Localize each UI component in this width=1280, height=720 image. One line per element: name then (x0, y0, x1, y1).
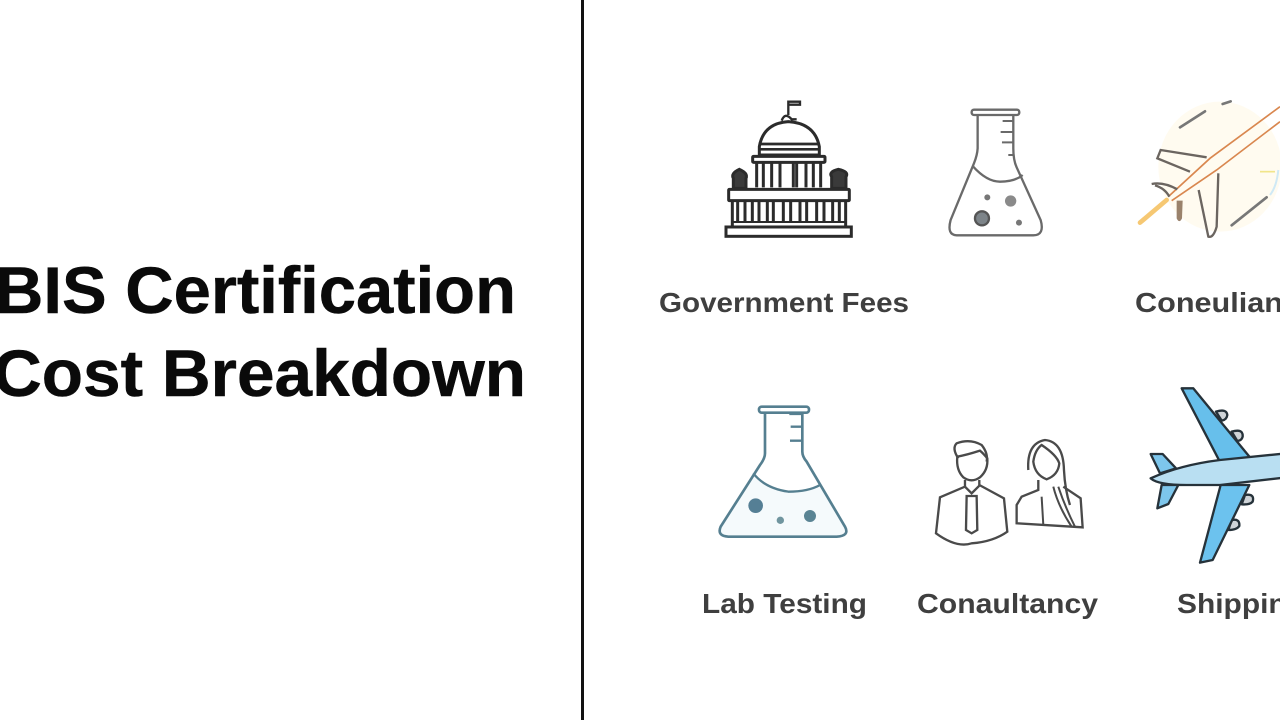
label: Government Fees: Government Fees (659, 287, 909, 318)
icon: government building (726, 102, 851, 236)
title (0, 253, 526, 410)
label: Conaultancy: Conaultancy (917, 588, 1098, 619)
label: Coneulian: Coneulian (1135, 287, 1280, 318)
title: BIS Certification (0, 253, 516, 327)
icon: consultants (936, 440, 1083, 545)
icon: blue airplane (1151, 388, 1280, 563)
icon: faded airplane (1140, 101, 1280, 237)
icon: grey flask (949, 110, 1042, 235)
icon: blue flask (720, 407, 846, 537)
vertical divider (581, 0, 584, 720)
man (936, 441, 1007, 545)
woman (1017, 440, 1083, 527)
title: Cost Breakdown (0, 336, 526, 410)
label: Lab Testing: Lab Testing (702, 588, 867, 619)
